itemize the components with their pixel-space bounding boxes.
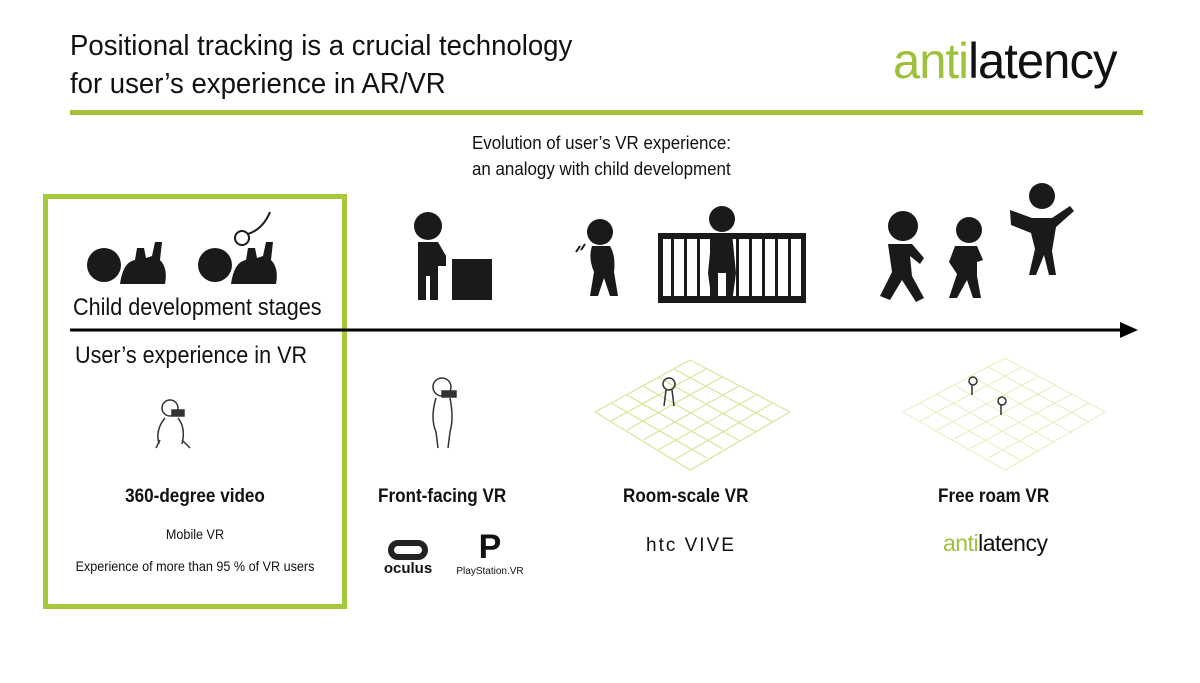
icon: babies lying <box>87 212 277 284</box>
logo: oculus: oculus <box>384 560 432 577</box>
stage: 360 video: Mobile VR <box>166 526 224 542</box>
icon: VR user figures <box>156 377 1006 448</box>
subtitle: Evolution of user’s VR experience: <box>472 133 731 153</box>
title: for user’s experience in AR/VR <box>70 68 446 100</box>
grid: room-scale <box>595 360 790 470</box>
subtitle: an analogy with child development <box>472 159 731 179</box>
stage: room-scale: Room-scale VR <box>623 486 748 507</box>
label: child development stages: Child development stages <box>73 294 322 321</box>
logo: htc vive: htc VIVE <box>646 535 736 556</box>
logo: playstation VR: PlayStation.VR <box>456 566 524 577</box>
logo: antilatency header: antilatency <box>893 33 1117 89</box>
icon: child standing at box <box>414 212 492 300</box>
icon: walking child <box>576 219 618 296</box>
panel: highlighted 360 video <box>46 196 344 606</box>
title <box>70 30 572 100</box>
arrow: timeline <box>70 322 1138 338</box>
stage: 360 video: 360-degree video <box>125 486 265 507</box>
stage: free roam: Free roam VR <box>938 486 1049 507</box>
logo: playstation VR <box>456 528 524 577</box>
stage: 360 video: Experience of more than 95 % of VR users <box>76 558 314 574</box>
stage: 360 video <box>76 486 314 574</box>
title: Positional tracking is a crucial technology <box>70 30 572 62</box>
logo: oculus <box>384 540 432 577</box>
icon: child in crib <box>658 206 806 303</box>
stage: front-facing: Front-facing VR <box>378 486 506 507</box>
grid: free roam <box>903 358 1105 470</box>
icon: running children <box>880 183 1074 302</box>
label: user's experience in VR: User’s experience in VR <box>75 342 307 369</box>
logo: antilatency small: antilatency <box>943 530 1047 556</box>
logo: playstation VR: P <box>479 528 501 566</box>
subtitle <box>472 133 731 179</box>
